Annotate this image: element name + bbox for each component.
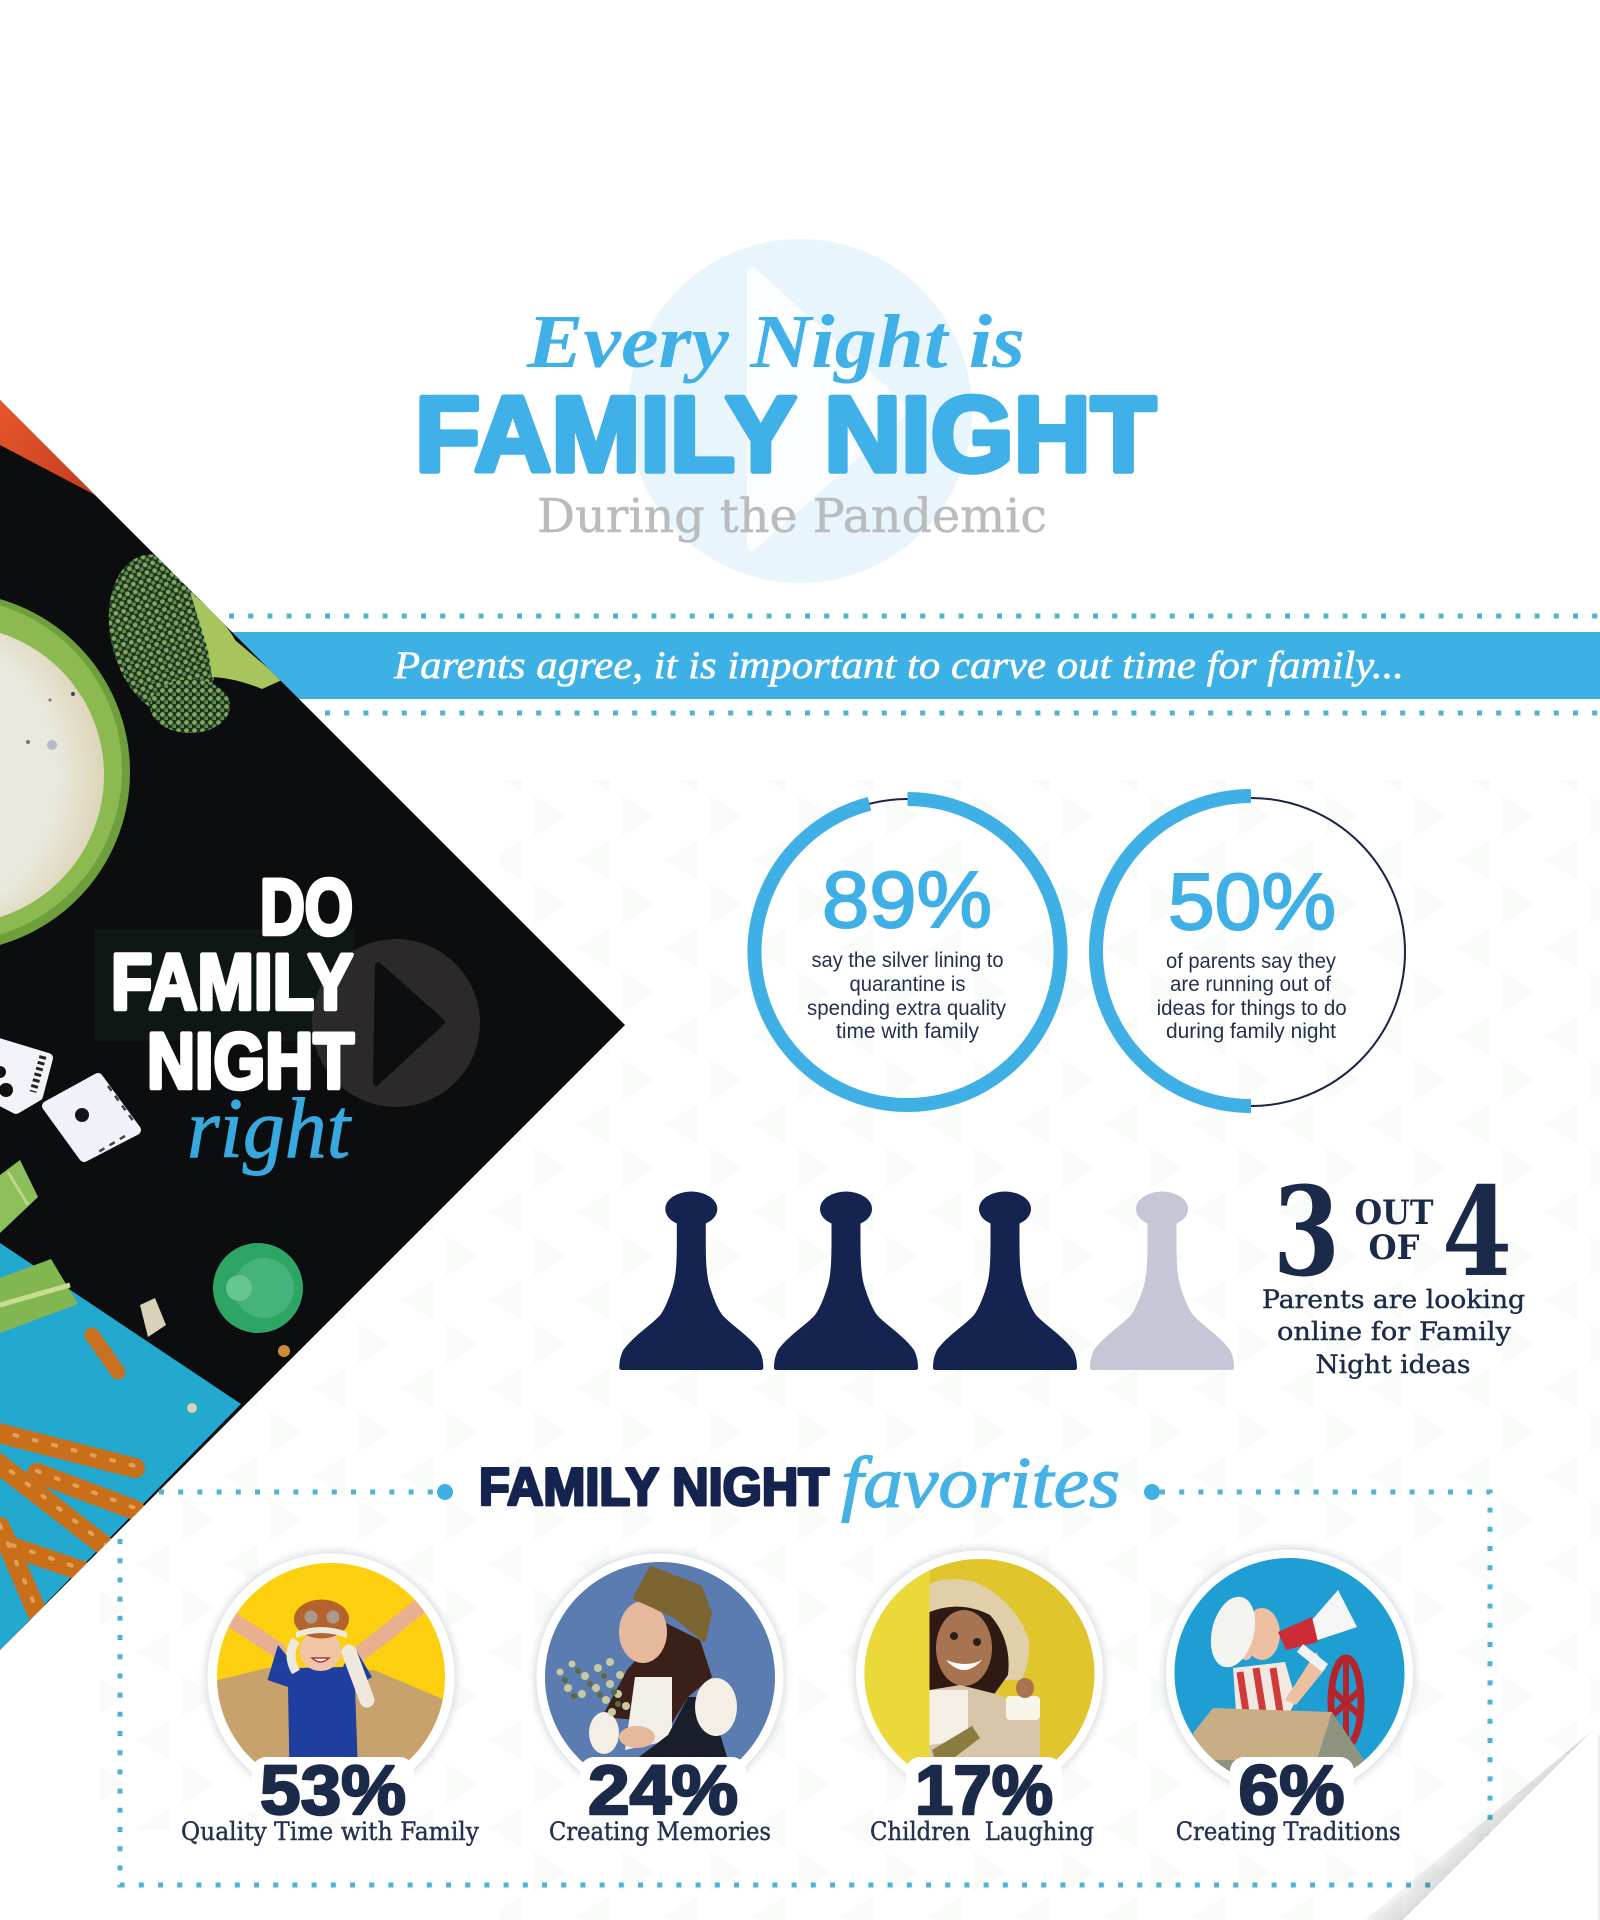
stat description: Parents are looking [1262,1285,1525,1314]
stat: 3 out of 4: OUT [1354,1193,1434,1233]
banner text: Parents agree, it is important to carve out time for family... [393,644,1404,687]
favorite: children laughing [854,1548,1106,1846]
halo behind value [580,1757,746,1817]
label: Children Laughing [870,1817,1094,1846]
dotted frame [120,1484,1490,1885]
favorites heading: FAMILY NIGHT [479,1458,829,1517]
value: 53% [260,1751,406,1829]
value: 6% [1238,1751,1344,1829]
stat ring: 89% [754,799,1061,1105]
stat description [807,949,1006,1043]
favorite: creating memories [534,1551,786,1846]
stat description: spending extra quality [807,997,1006,1020]
stat description: online for Family [1277,1317,1512,1346]
label: Creating Traditions [1176,1817,1401,1846]
banner [200,616,1600,713]
photo: girl in safari hat [864,1559,1094,1764]
title [415,300,1156,544]
stat: 3 out of 4: 4 [1442,1161,1512,1305]
favorites heading: favorites [841,1442,1120,1523]
ghost play icon [95,929,480,1107]
page curl [1365,1723,1600,1920]
celery [0,1160,78,1333]
stat description: during family night [1166,1020,1336,1043]
watermark: play circle [628,239,972,583]
value: 24% [588,1751,738,1829]
heading: do family night right: DO [260,862,353,951]
title line: FAMILY NIGHT: FAMILY NIGHT [415,374,1156,494]
value: 17% [915,1751,1053,1829]
title line: Every Night is: Every Night is [526,300,1025,384]
label: Quality Time with Family [181,1817,480,1846]
stat description [1157,950,1347,1043]
heading: do family night right: FAMILY [111,937,353,1026]
broccoli [108,554,280,733]
panel: food photo diamond [0,400,625,1650]
crumbs [140,1298,290,1413]
panel: family night favorites [120,1442,1490,1885]
photo: girl with flowers [545,1562,775,1762]
carrot [0,400,95,495]
stat description: are running out of [1170,973,1331,996]
stat description: ideas for things to do [1157,997,1347,1020]
favorites heading [479,1442,1120,1523]
stat description [1262,1285,1525,1379]
title line: During the Pandemic: During the Pandemic [537,489,1047,544]
stat value: 89% [822,855,992,944]
stat ring: 50% [1096,796,1405,1106]
label: Creating Memories [549,1817,771,1846]
pretzels [0,1335,135,1612]
stat: 3 out of 4 [1262,1161,1525,1379]
dice [0,1042,136,1157]
stat description: of parents say they [1166,950,1336,973]
halo behind value [906,1757,1062,1817]
halo behind value [252,1757,414,1817]
bowl of dip [0,592,130,952]
heading: do family night right: right [187,1080,352,1176]
photo: boy pilot [217,1563,445,1762]
napkin [0,1243,241,1650]
favorite: quality time [181,1551,480,1846]
game pawn top view [213,1243,303,1333]
stat description: time with family [836,1020,979,1043]
heading: do family night right [111,862,354,1176]
halo behind value [1230,1757,1354,1817]
stat: 3 out of 4: 3 [1273,1161,1340,1305]
icon: four game pawns, 3 of 4 filled [619,1192,1234,1370]
stat: 3 out of 4: OF [1368,1228,1420,1268]
favorite: creating traditions [1164,1547,1416,1846]
stat value: 50% [1168,857,1336,946]
stat description: quarantine is [850,973,966,996]
heading: do family night right: NIGHT [147,1016,354,1105]
photo: boy with megaphone [1174,1558,1404,1772]
stat description: Night ideas [1316,1350,1470,1379]
stat description: say the silver lining to [812,949,1004,972]
